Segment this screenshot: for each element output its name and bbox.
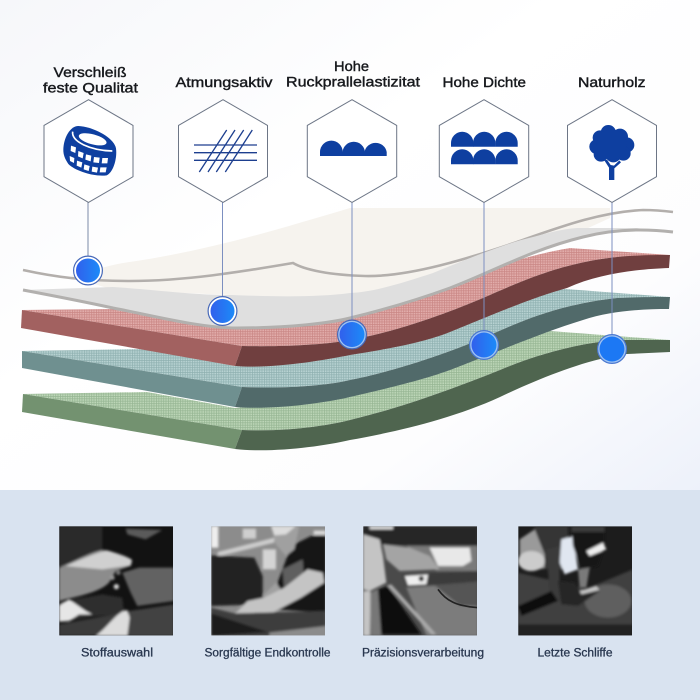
- heading: Verschleiß feste Qualitat: Verschleiß: [54, 64, 126, 80]
- marker dot 2: [208, 297, 237, 325]
- heading: Hohe Ruckprallelastizitat: Ruckprallelastizitat: [286, 74, 420, 90]
- heading: Atmungsaktiv: Atmungsaktiv: [176, 74, 272, 90]
- callout line: Verschleiß: [87, 202, 89, 258]
- photo: Präzisionsverarbeitung: [363, 526, 478, 636]
- heading: Hohe Ruckprallelastizitat: Hohe: [334, 58, 369, 74]
- layer: grey second film: [23, 228, 673, 328]
- callout line: Atmungsaktiv: [222, 202, 224, 298]
- icon: two rows of domes: [451, 132, 518, 164]
- marker dot 5: [598, 335, 626, 363]
- layer: teal foam: [22, 288, 670, 408]
- caption: Präzisionsverarbeitung: Präzisionsverarbeitung: [362, 648, 484, 660]
- icon: mesh lines: [194, 130, 257, 172]
- hexagon 1 with wear-resistant icon: [44, 100, 133, 202]
- icon: tyre: [63, 126, 116, 176]
- callout line: Dichte: [483, 202, 485, 332]
- bottom panel: [0, 490, 700, 700]
- marker dot 1: [74, 256, 102, 285]
- caption: Stoffauswahl: Stoffauswahl: [81, 648, 153, 660]
- caption: Sorgfältige Endkontrolle: Sorgfältige Endkontrolle: [204, 648, 330, 660]
- icon: three domes: [320, 141, 387, 156]
- photo: Letzte Schliffe: [518, 526, 633, 636]
- hexagon 5 with tree icon: [568, 100, 656, 202]
- layer: beige top film: [23, 208, 673, 300]
- hexagon 4 with density icon: [439, 100, 529, 202]
- photo: Sorgfältige Endkontrolle: [211, 526, 326, 636]
- hexagon 2 with breathable mesh icon: [178, 100, 268, 202]
- marker dot 4: [470, 331, 498, 359]
- photo: Stoffauswahl: [59, 526, 174, 636]
- marker dot 3: [338, 320, 366, 349]
- scissor cable: [438, 589, 478, 608]
- background: [0, 0, 700, 490]
- hexagon 3 with rebound icon: [307, 100, 397, 202]
- heading: Hohe Dichte: Hohe Dichte: [442, 74, 526, 90]
- layered material diagram: [21, 208, 673, 450]
- callout line: Naturholz: [611, 202, 613, 336]
- callout line: Rückprall: [351, 202, 353, 322]
- heading: Naturholz: Naturholz: [578, 74, 646, 90]
- caption: Letzte Schliffe: Letzte Schliffe: [538, 648, 612, 660]
- icon: tree: [589, 125, 634, 180]
- layer: red foam: [21, 248, 670, 367]
- layer: green foam: [22, 331, 670, 450]
- heading: Verschleiß feste Qualitat: feste Qualitat: [43, 80, 138, 96]
